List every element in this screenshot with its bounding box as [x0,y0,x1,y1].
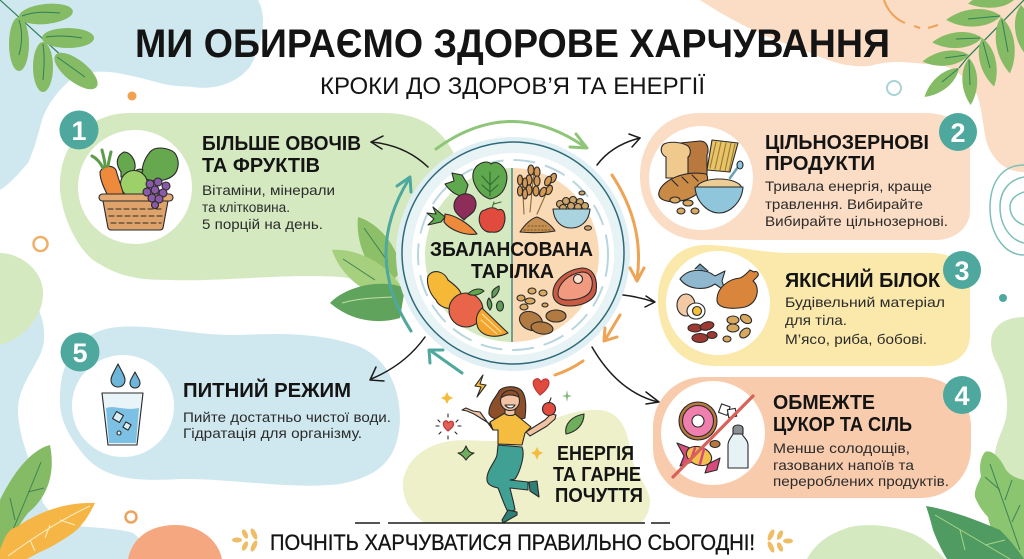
heading 3: ЯКІСНИЙ БІЛОК [785,268,941,292]
arrow: orange lower [604,315,620,341]
plate halves [425,168,512,342]
arrow: teal bottom [429,350,462,373]
text 4 [773,440,949,489]
badge 4 [943,376,981,414]
leaf cluster by the plate [330,217,405,321]
text 4: Менше солодощів, [773,440,910,456]
central plate [396,137,630,371]
plate label [430,239,593,283]
text 5: Пийте достатньо чистої води. [183,409,391,425]
icons: energy symbols [436,375,584,460]
text 1: 5 порцій на день. [202,216,323,232]
plate label: ТАРІЛКА [471,261,554,283]
food: vegetables [427,162,507,234]
arrow: to card 4 [592,347,659,404]
orange dash [555,361,583,375]
text 5: Гідратація для організму. [183,425,362,441]
panel: 2 whole grains [640,113,977,240]
badge 2: 2 [950,118,966,148]
heading 1 [202,133,361,177]
footer callout: ПОЧНІТЬ ХАРЧУВАТИСЯ ПРАВИЛЬНО СЬОГОДНІ! [270,530,755,555]
food: fruit [427,272,508,336]
title: МИ ОБИРАЄМО ЗДОРОВЕ ХАРЧУВАННЯ [135,22,890,66]
energy caption [553,443,643,507]
branch: top right [920,0,1024,105]
panel: 1 vegetables and fruits [60,110,462,320]
heading 2: ПРОДУКТИ [765,153,875,175]
text 4: перероблених продуктів. [773,473,949,489]
heading 1: ТА ФРУКТІВ [202,155,320,177]
badge 5: 5 [72,338,88,368]
icon: wheat right [766,529,793,553]
icon: wheat left [232,528,259,552]
plate label: ЗБАЛАНСОВАНА [430,239,593,261]
red strike line [673,396,753,477]
food: salmon and nuts [516,268,596,335]
heading 2 [765,132,929,175]
heading 1: БІЛЬШЕ ОВОЧІВ [202,133,361,155]
heading 5: ПИТНИЙ РЕЖИМ [183,378,351,402]
badge 1: 1 [71,116,87,146]
badge 5 [60,332,100,372]
illustration: happy woman with apple [462,387,556,523]
text 1: Вітаміни, мінерали [202,182,335,198]
food: grains [518,165,592,233]
arrow: to card 5 [370,337,425,381]
subtitle: КРОКИ ДО ЗДОРОВ’Я ТА ЕНЕРГІЇ [320,73,705,100]
arrow: teal left [386,177,411,331]
badge 3 [943,251,981,289]
text 3 [785,294,945,347]
text 3: Будівельний матеріал [785,294,945,310]
arrow: green top [436,121,587,149]
panel: 3 quality protein [658,245,981,366]
heading 4: ЦУКОР ТА СІЛЬ [773,414,912,436]
icon: sweets crossed out [677,402,748,473]
text 1: та клітковина. [202,199,290,215]
energy caption: ЕНЕРГІЯ [557,443,634,465]
heading 4: ОБМЕЖТЕ [773,392,875,414]
icon: fish chicken eggs beans [677,264,758,342]
heading 2: ЦІЛЬНОЗЕРНОВІ [765,132,929,154]
panel: 4 limit sugar and salt [653,376,981,498]
text 4: газованих напоїв та [773,457,914,473]
icon: glass of water [102,364,143,445]
badge 3: 3 [954,256,970,286]
badge 4: 4 [954,381,970,411]
panel: 5 drinking water [60,326,400,486]
branch: top left [0,0,103,96]
arrow: to card 1 [371,136,428,167]
badge 1 [60,110,98,150]
icon: basket with vegetables [92,148,178,230]
branch: bottom left leaves [0,445,95,559]
text 3: для тіла. [785,312,847,328]
text 2 [765,178,948,229]
energy caption: ПОЧУТТЯ [555,485,643,507]
arrow: to card 2 [597,134,640,165]
heading 4 [773,392,912,436]
text 3: М’ясо, риба, бобові. [785,331,927,347]
text 2: травлення. Вибирайте [765,196,923,212]
arrow: orange right [612,175,644,281]
branch: bottom right leaves [926,451,1024,559]
icon: bread and porridge [659,140,743,214]
text 1 [202,182,335,232]
arrows: cycle around plate [370,121,659,404]
energy caption: ТА ГАРНЕ [553,464,641,486]
badge 2 [939,113,977,151]
text 5 [183,409,391,441]
arrow: to card 3 [623,295,655,307]
text 2: Вибирайте цільнозернові. [765,213,948,229]
text 2: Тривала енергія, краще [765,178,932,194]
